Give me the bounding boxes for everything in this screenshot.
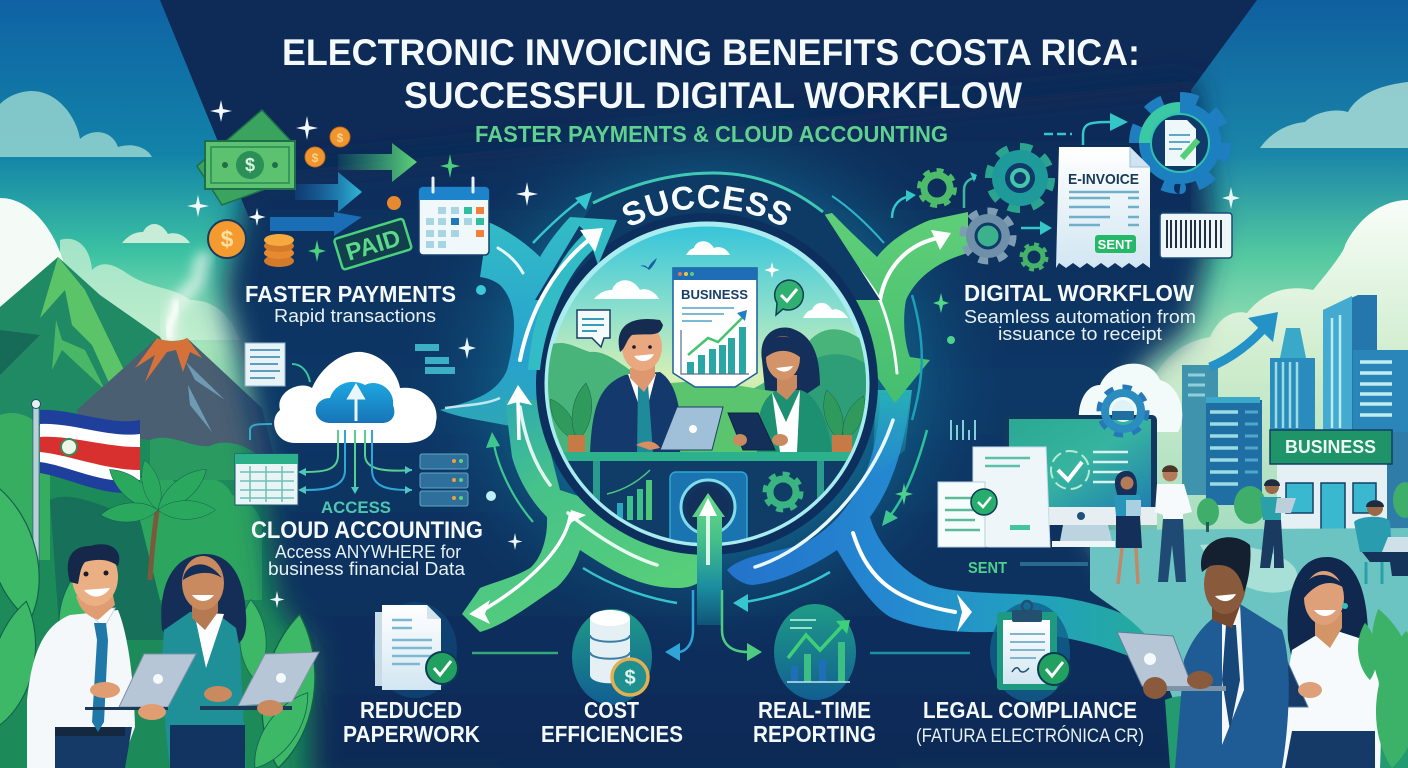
label: real-time reporting: REAL-TIME — [758, 697, 871, 723]
icon: servers — [420, 454, 468, 506]
e-invoice document — [1056, 147, 1150, 268]
sent label: SENT — [968, 560, 1007, 577]
arrows — [892, 113, 1128, 235]
faster payments icons — [187, 100, 538, 270]
label: reduced paperwork — [343, 697, 480, 747]
icon: coins: $ — [312, 151, 319, 165]
arrow: blue — [295, 172, 362, 212]
arrow: blue lower — [270, 212, 362, 236]
flow band: blue right sweep — [727, 390, 1190, 680]
icon: document — [245, 343, 285, 386]
label: legal compliance: (FATURA ELECTRÓNICA CR) — [916, 725, 1144, 747]
teal arrow head into circle — [520, 217, 617, 370]
label: reduced paperwork: PAPERWORK — [343, 721, 480, 747]
label: digital workflow: DIGITAL WORKFLOW — [964, 280, 1194, 306]
label: cloud accounting: ACCESS — [321, 498, 391, 517]
business board: BUSINESS — [681, 288, 748, 302]
costa rica flag — [32, 400, 140, 580]
icon: coins: $ — [337, 131, 344, 145]
icon: coins — [208, 127, 401, 267]
flow band: teal upper left — [440, 192, 600, 430]
bottom icon: reduced paperwork — [373, 602, 458, 698]
dark area behind success heading — [535, 173, 880, 300]
man at desk — [590, 319, 681, 453]
small man — [1155, 465, 1192, 582]
label: legal compliance: LEGAL COMPLIANCE — [923, 697, 1137, 723]
icon: spreadsheet — [235, 454, 298, 505]
label: reduced paperwork: REDUCED — [360, 697, 462, 723]
bar ticks and signal — [951, 420, 975, 440]
label: faster payments — [245, 281, 456, 326]
flow band: green lower left — [462, 385, 712, 632]
background sky: right — [900, 0, 1408, 768]
label: real-time reporting: REPORTING — [753, 721, 876, 747]
e-invoice document: E-INVOICE — [1068, 171, 1139, 188]
icon: upload cloud — [316, 382, 394, 423]
bottom icon: cost efficiencies: $ — [624, 667, 636, 689]
dark centre panel — [160, 0, 1257, 768]
icon: large gear with document — [1135, 98, 1225, 188]
arched heading: SUCCESS: SUCCESS — [622, 185, 791, 226]
small woman — [1114, 471, 1142, 584]
label: cloud accounting: Access ANYWHERE for — [275, 542, 461, 562]
cloud accounting icons — [235, 285, 522, 608]
receipts and documents — [938, 447, 1050, 547]
label: cloud accounting: business financial Data — [268, 559, 466, 579]
connector line — [870, 652, 970, 654]
label: cloud accounting: CLOUD ACCOUNTING — [251, 517, 483, 544]
city skyline — [1182, 295, 1408, 505]
plants — [550, 382, 865, 436]
bottom icon: cost efficiencies — [572, 609, 652, 705]
central circle ring — [536, 213, 878, 555]
icon: coins: $ — [221, 226, 234, 252]
icon: money bills: $ — [245, 155, 255, 175]
arrow: green — [338, 143, 417, 182]
stamp: PAID: PAID — [343, 225, 404, 267]
seated man — [1354, 500, 1408, 584]
title: ELECTRONIC INVOICING BENEFITS COSTA RICA: — [282, 32, 1140, 73]
right woman with tablet — [1247, 557, 1381, 768]
icon: small green gear — [920, 171, 954, 205]
right man with laptop — [1117, 537, 1289, 768]
clouds in scene — [594, 241, 848, 318]
scene contents — [540, 241, 871, 556]
label: cost efficiencies: EFFICIENCIES — [541, 721, 683, 747]
tablet — [728, 413, 775, 450]
connector lines — [298, 430, 412, 494]
icon: data chips — [415, 344, 455, 374]
bottom icon: real-time reporting — [774, 604, 856, 700]
monitor — [1004, 415, 1157, 547]
flow band: green upper right — [802, 196, 968, 526]
icon: gray gear — [963, 211, 1013, 261]
label: faster payments: FASTER PAYMENTS — [245, 281, 456, 307]
label: faster payments: Rapid transactions — [274, 306, 436, 326]
title: SUCCESSFUL DIGITAL WORKFLOW — [404, 75, 1022, 116]
left clouds — [0, 91, 240, 340]
business building — [1270, 430, 1408, 532]
central circle scene — [540, 224, 871, 556]
stamp: PAID — [334, 218, 412, 270]
icon: medium gear — [989, 147, 1051, 209]
desk and control panel — [563, 452, 851, 461]
label: real-time reporting — [753, 697, 876, 747]
cloud behind monitor — [1079, 364, 1182, 432]
label: cost efficiencies — [541, 697, 683, 747]
connector line — [472, 652, 558, 654]
business building: BUSINESS — [1285, 437, 1376, 457]
bottom icon: legal compliance — [990, 601, 1070, 702]
label: cloud accounting — [251, 498, 483, 579]
central glow — [397, 80, 1017, 660]
subtitle: FASTER PAYMENTS & CLOUD ACCOUNTING — [475, 121, 948, 147]
title — [282, 32, 1140, 116]
left man with laptop — [27, 544, 196, 768]
label: digital workflow: issuance to receipt — [998, 324, 1162, 344]
right clouds — [1157, 82, 1408, 540]
icon: cloud — [274, 352, 437, 443]
label: digital workflow: Seamless automation from — [964, 307, 1196, 327]
speech bubble — [577, 310, 610, 347]
icon: barcode — [1160, 213, 1232, 258]
small people — [1114, 465, 1408, 584]
woman at desk — [757, 327, 832, 453]
icon: money bills — [197, 110, 295, 205]
jungle background — [0, 413, 330, 768]
mountain — [0, 257, 262, 440]
icon: monitor gear — [1100, 388, 1146, 434]
small man with laptop — [1260, 479, 1296, 568]
icon: tiny gear — [1022, 245, 1046, 269]
icon: calendar — [419, 178, 489, 255]
outer success arc — [593, 173, 823, 212]
volcano with smoke — [77, 258, 275, 460]
label: digital workflow — [964, 280, 1196, 344]
digital workflow icons — [892, 98, 1240, 344]
centre up arrow — [692, 493, 725, 625]
left woman with laptop — [161, 554, 319, 768]
jungle foliage and palm — [0, 458, 325, 768]
right foliage — [1356, 604, 1408, 768]
thin flow arrows, bottom centre — [665, 572, 830, 661]
label: cost efficiencies: COST — [584, 697, 639, 723]
trees and ground — [1090, 482, 1408, 768]
check bubble — [775, 280, 803, 315]
background sky: left — [0, 0, 500, 768]
business board — [673, 268, 757, 387]
sent label — [968, 560, 1088, 577]
sparkles — [187, 100, 538, 262]
label: legal compliance — [916, 697, 1144, 747]
scene ring — [547, 224, 867, 544]
laptop — [660, 407, 723, 450]
e-invoice document: SENT — [1098, 237, 1132, 252]
